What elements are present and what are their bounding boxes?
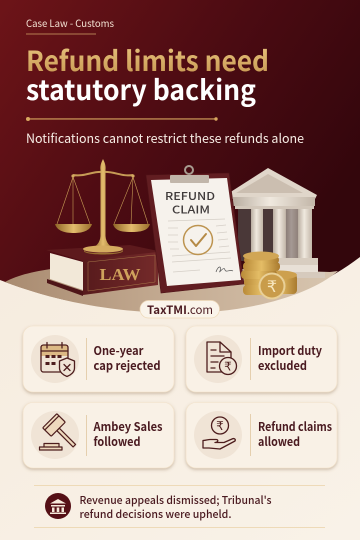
illustration: balance scales <box>55 159 150 254</box>
footer text: Revenue appeals dismissed; Tribunal's <box>80 492 272 508</box>
clipboard paper <box>151 178 241 286</box>
background: maroon header <box>0 0 360 300</box>
scale base <box>83 246 123 252</box>
rupee coin: ₹ <box>267 273 277 297</box>
header label underline <box>26 33 96 35</box>
temple interior <box>238 205 308 261</box>
book gold border <box>88 255 155 291</box>
footer callout <box>34 485 325 528</box>
icon: document with rupee: ₹ <box>224 358 232 374</box>
card text <box>258 418 332 450</box>
temple entablature <box>233 197 315 206</box>
book front cover <box>83 252 158 295</box>
illustration: refund claim clipboard: CLAIM <box>172 202 210 218</box>
title: Refund limits need <box>26 39 269 79</box>
icon: hand with rupee coin: ₹ <box>216 417 224 434</box>
book pages <box>50 253 83 290</box>
card: one-year cap rejected <box>23 326 174 392</box>
card text: Ambey Sales <box>93 418 163 435</box>
illustration: refund claim clipboard <box>146 166 244 293</box>
card text: excluded <box>258 357 307 374</box>
clipboard form lines <box>168 219 231 272</box>
clipboard heading: REFUND <box>165 188 215 204</box>
card text: followed <box>94 433 140 450</box>
rear coin stack <box>262 274 297 294</box>
icon: gavel <box>31 411 82 459</box>
card text: Import duty <box>258 342 322 359</box>
subtitle: Notifications cannot restrict these refunds alone <box>26 128 304 147</box>
book top cover <box>46 245 158 261</box>
icon: calendar with shield <box>31 335 79 383</box>
card text: cap rejected <box>94 357 160 374</box>
ground: tan curved platform <box>5 265 338 313</box>
card: refund claims allowed <box>186 402 337 468</box>
book lower cover <box>47 279 83 296</box>
card text: allowed <box>258 433 300 450</box>
temple pediment <box>229 168 317 199</box>
brand pill: TaxTMI.com <box>147 302 213 318</box>
temple columns <box>251 209 312 265</box>
clipboard clip <box>170 166 209 183</box>
tall coin stack <box>241 252 280 295</box>
footer text <box>80 492 272 522</box>
icon: document with rupee <box>194 335 242 383</box>
card text <box>93 418 163 450</box>
title: statutory backing <box>26 68 256 108</box>
card text: Refund claims <box>258 418 332 435</box>
book title: LAW <box>100 265 140 284</box>
card text <box>94 342 160 374</box>
clipboard signature <box>216 267 233 272</box>
footer text: refund decisions were upheld. <box>80 506 232 522</box>
illustration: law book <box>46 245 158 296</box>
title rule with end dots <box>26 117 218 121</box>
header label: Case Law - Customs <box>26 15 114 30</box>
scale beam <box>73 172 133 175</box>
temple steps <box>270 258 318 265</box>
card divider <box>85 415 88 456</box>
scale pole <box>93 159 113 248</box>
card divider <box>85 338 88 380</box>
card text: One-year <box>94 342 144 359</box>
background: cream lower page <box>0 257 360 540</box>
clipboard board <box>146 173 244 293</box>
card divider <box>249 414 252 456</box>
scale left pan <box>55 224 92 233</box>
title <box>26 39 269 108</box>
clipboard check badge <box>184 226 212 254</box>
icon: court building badge <box>45 493 71 519</box>
scale strings <box>57 177 148 224</box>
card: ambey sales followed <box>23 402 174 468</box>
card text <box>258 342 322 374</box>
icon: hand with rupee coin <box>194 411 242 459</box>
illustration: temple <box>229 168 325 278</box>
scale right pan <box>113 224 150 232</box>
card: import duty excluded <box>186 326 337 392</box>
illustration: gold coins <box>241 252 297 300</box>
card divider <box>249 338 252 380</box>
